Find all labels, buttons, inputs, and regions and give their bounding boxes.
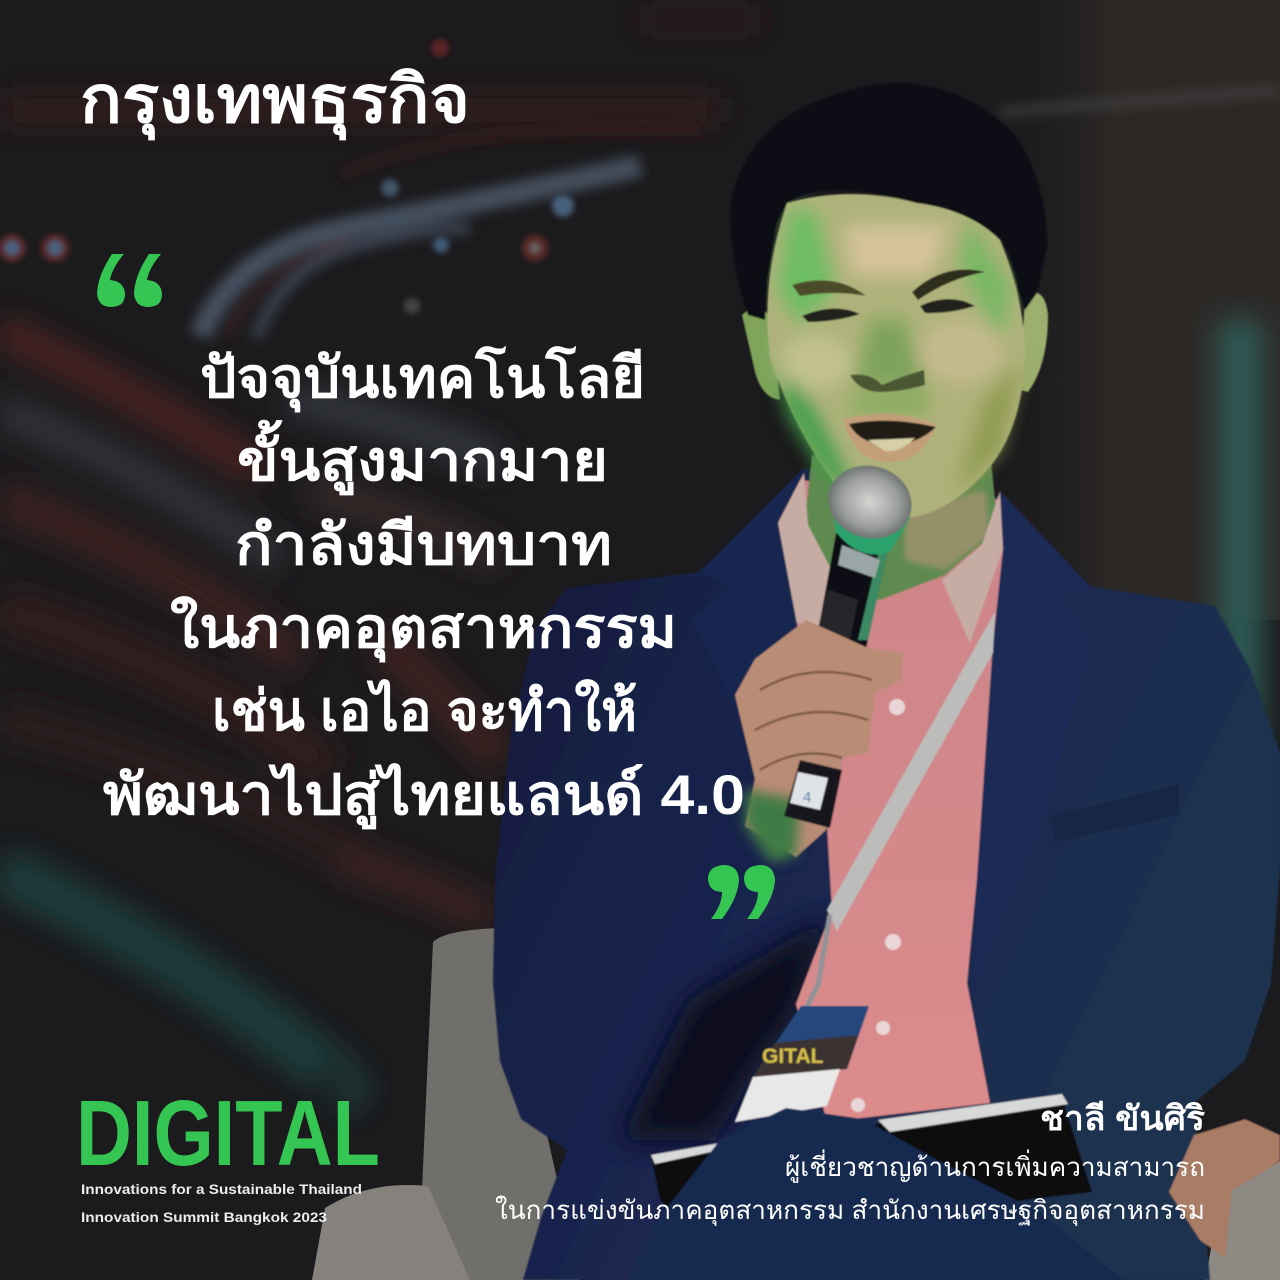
microphone xyxy=(784,456,920,826)
event logo: DIGITAL xyxy=(76,1081,380,1185)
nose xyxy=(850,370,925,392)
armchair xyxy=(312,928,1280,1280)
jacket pocket xyxy=(1051,784,1179,842)
hand holding microphone xyxy=(735,620,903,857)
jacket shadow under sleeve xyxy=(620,915,830,1140)
opening quote mark xyxy=(97,254,162,307)
quote text xyxy=(103,345,745,830)
quote text: กำลังมีบทบาท xyxy=(235,513,612,576)
closing quote mark xyxy=(708,865,775,919)
speaker caption: ในการแข่งขันภาคอุตสาหกรรม สำนักงานเศรษฐกิจอุตสาหกรรม xyxy=(495,1195,1205,1226)
microphone base: 4 xyxy=(803,789,811,806)
lanyard xyxy=(827,612,995,931)
event logo: Innovation Summit Bangkok 2023 xyxy=(81,1209,327,1225)
neck xyxy=(805,450,998,600)
jacket lapels xyxy=(692,468,1092,983)
speaker caption xyxy=(495,1100,1206,1226)
hair xyxy=(730,83,1047,320)
speaker caption: ชาลี ขันศิริ xyxy=(1040,1100,1206,1138)
eyebrows and eyes xyxy=(792,270,985,322)
quote text: ในภาคอุตสาหกรรม xyxy=(170,595,677,663)
suit jacket xyxy=(493,468,1280,1280)
badge: GITAL xyxy=(762,1045,824,1068)
speaker caption: ผู้เชี่ยวชาญด้านการเพิ่มความสามารถ xyxy=(785,1149,1205,1183)
shirt collar xyxy=(778,473,1003,643)
right ear and left ear xyxy=(742,292,1048,400)
badge xyxy=(735,1006,869,1122)
speaker figure xyxy=(493,83,1280,1280)
tablet xyxy=(651,1094,1092,1240)
quote text: เช่น เอไอ จะทำให้ xyxy=(212,678,637,742)
trousers xyxy=(628,1108,1123,1280)
shirt buttons xyxy=(851,699,905,1112)
left hand on chair xyxy=(1169,1119,1280,1258)
event logo: Innovations for a Sustainable Thailand xyxy=(81,1181,362,1197)
quote text: พัฒนาไปสู่ไทยแลนด์ 4.0 xyxy=(103,762,745,830)
masthead title: กรุงเทพธุรกิจ xyxy=(80,62,470,141)
face xyxy=(767,194,1025,517)
shirt xyxy=(778,480,1003,1122)
mouth xyxy=(843,414,937,462)
quote text: ปัจจุบันเทคโนโลยี xyxy=(200,345,645,413)
microphone base xyxy=(784,760,842,828)
event logo xyxy=(76,1081,380,1225)
quote text: ขั้นสูงมากมาย xyxy=(237,420,608,496)
